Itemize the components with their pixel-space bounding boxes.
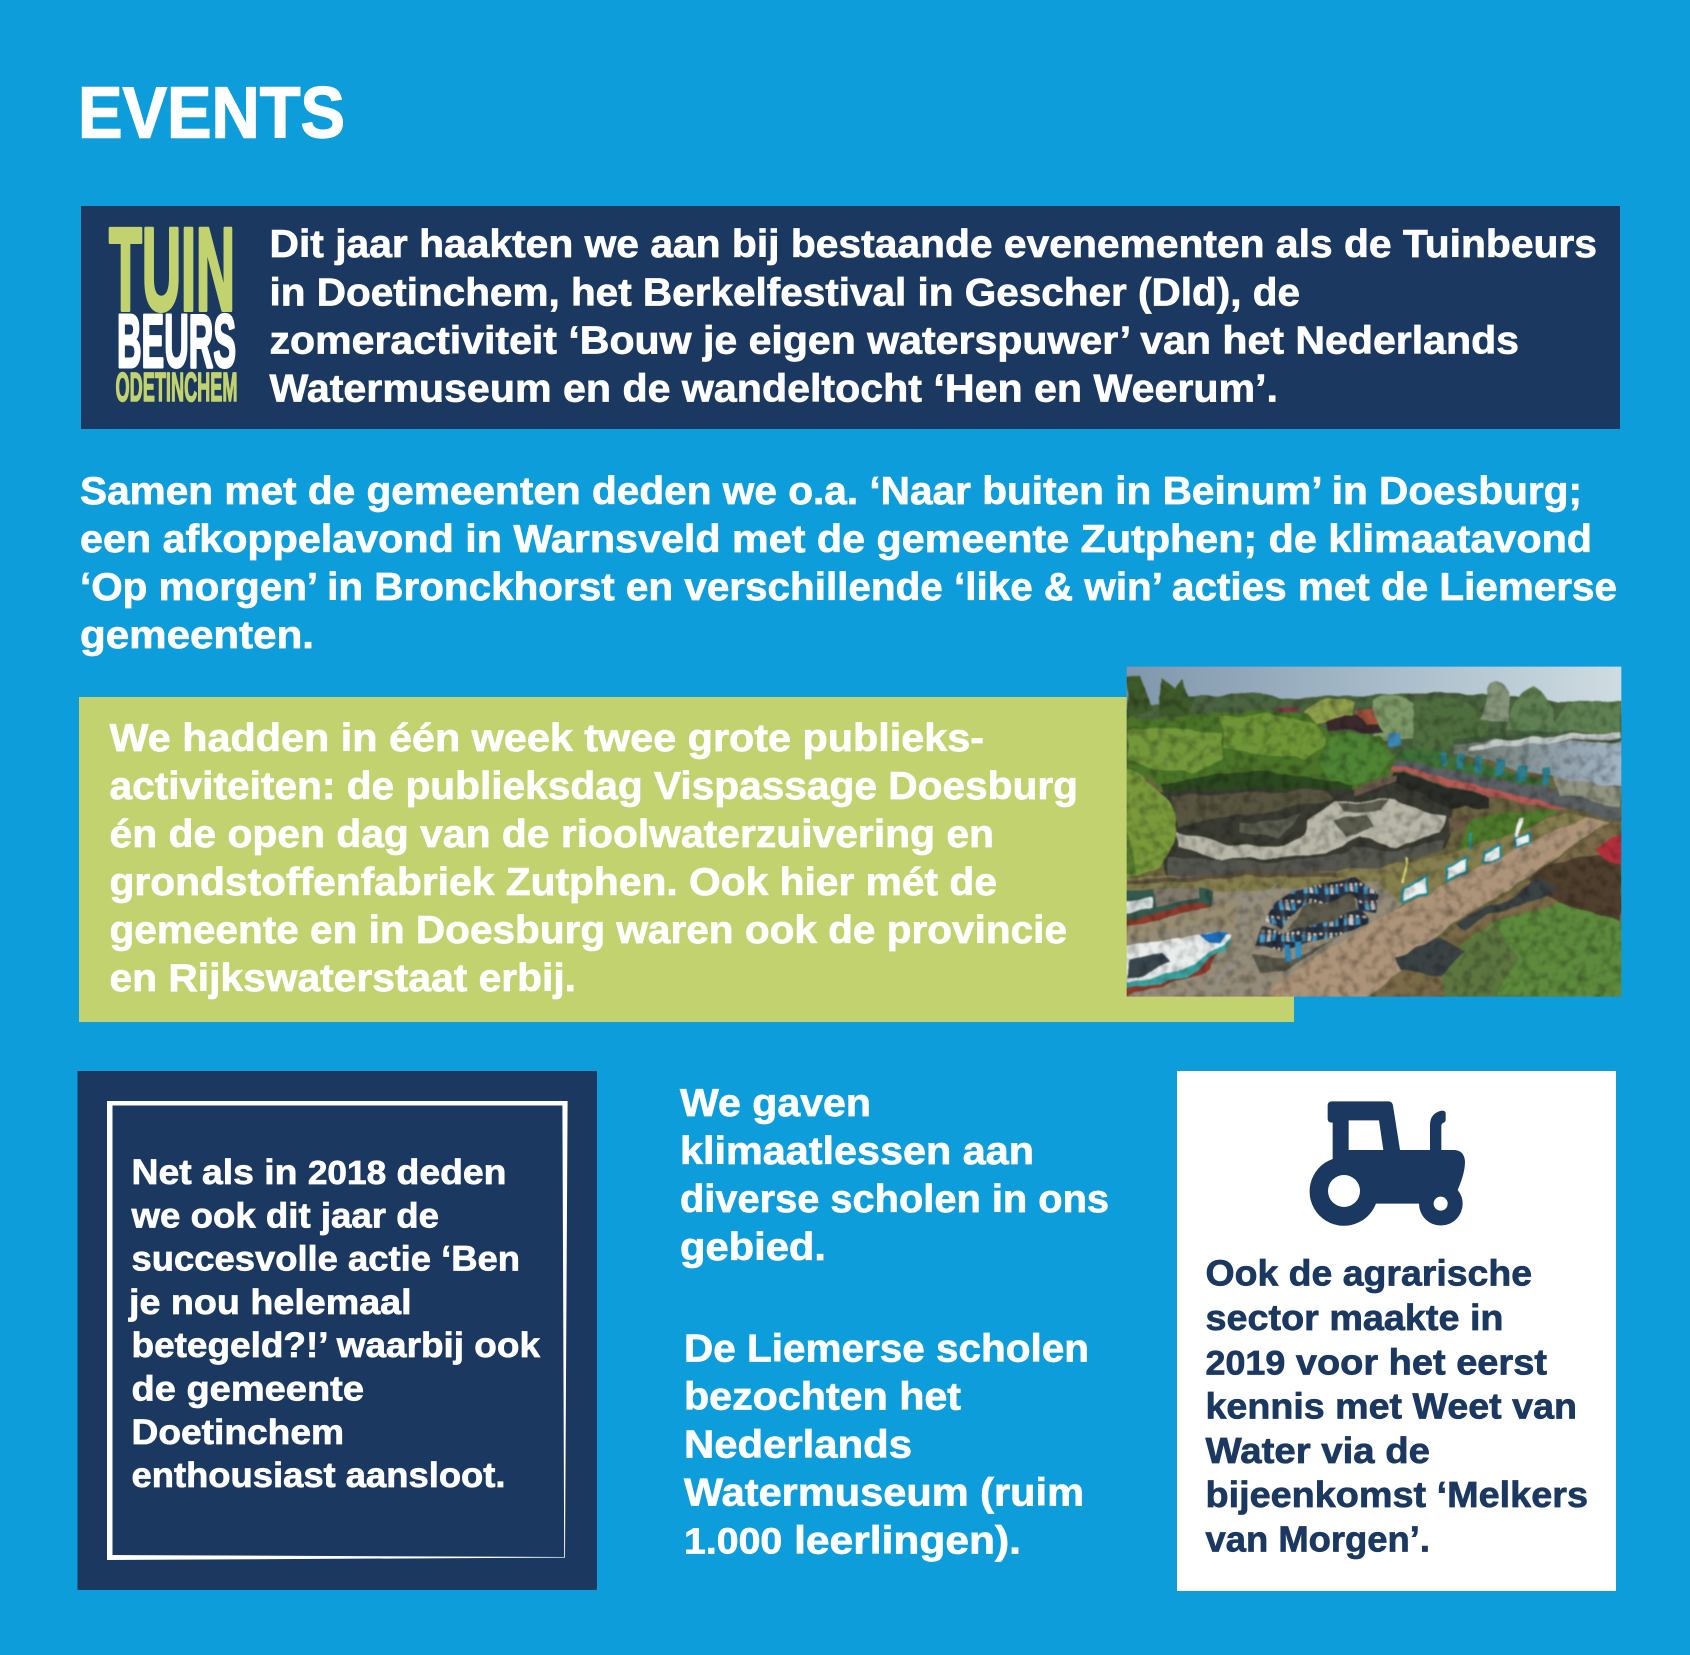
text: tile campaign: enthousiast aansloot.	[132, 1456, 506, 1495]
text: banner paragraph	[270, 223, 1597, 411]
text: banner paragraph: Dit jaar haakten we aan bij bestaande evenementen als de Tuinbeurs	[270, 223, 1597, 266]
text: public activities paragraph	[110, 717, 1078, 1000]
text: climate lessons: klimaatlessen aan	[680, 1130, 1034, 1173]
text: public activities paragraph: én de open dag van de rioolwaterzuivering en	[110, 813, 994, 856]
text: public activities paragraph: gemeente en in Doesburg waren ook de provincie	[110, 909, 1067, 952]
text: tile campaign: Doetinchem	[132, 1413, 344, 1452]
text: agricultural sector: 2019 voor het eerst	[1206, 1341, 1547, 1382]
icon: tractor	[1310, 1101, 1465, 1226]
text: tile campaign: we ook dit jaar de	[130, 1196, 439, 1235]
text: agricultural sector: kennis met Weet van	[1206, 1386, 1577, 1427]
panel: Tuinbeurs banner	[81, 204, 1620, 429]
text: public activities paragraph: en Rijkswaterstaat erbij.	[110, 957, 576, 1000]
text: agricultural sector: Water via de	[1206, 1430, 1430, 1471]
text: agricultural sector: van Morgen’.	[1206, 1518, 1430, 1560]
panel: Tuinbeurs banner: TUIN	[109, 204, 235, 336]
text: tile campaign	[128, 1153, 541, 1495]
text: banner paragraph: in Doetinchem, het Berkelfestival in Gescher (Dld), de	[270, 272, 1300, 314]
text: tile campaign: Net als in 2018 deden	[132, 1153, 506, 1192]
text: tile campaign: de gemeente	[132, 1370, 364, 1408]
photo: aerial view of the fish passage with crowd	[1126, 666, 1622, 997]
text: tile campaign: je nou helemaal	[128, 1283, 412, 1322]
text: climate lessons: diverse scholen in ons	[680, 1178, 1109, 1221]
text: agricultural sector: Ook de agrarische	[1206, 1252, 1532, 1294]
logo: Tuinbeurs Doetinchem	[109, 204, 238, 410]
text: water museum visits: 1.000 leerlingen).	[684, 1520, 1021, 1562]
text: agricultural sector: sector maakte in	[1206, 1297, 1504, 1338]
text: water museum visits: Watermuseum (ruim	[684, 1472, 1084, 1514]
text: water museum visits: Nederlands	[684, 1424, 912, 1466]
panel: Tuinbeurs banner: ODETINCHEM	[116, 364, 238, 410]
text: municipalities paragraph: Samen met de gemeenten deden we o.a. ‘Naar buiten in Beinum’ in Doesburg;	[80, 470, 1582, 513]
panel: agricultural sector	[1177, 1071, 1616, 1591]
text: climate lessons: gebied.	[680, 1226, 826, 1269]
panel: navy tile campaign	[78, 1071, 597, 1590]
text: tile campaign: betegeld?!’ waarbij ook	[132, 1326, 541, 1365]
text: municipalities paragraph: gemeenten.	[80, 614, 314, 657]
text: municipalities paragraph: een afkoppelavond in Warnsveld met de gemeente Zutphen; de klimaatavond	[80, 518, 1592, 561]
text: municipalities paragraph	[80, 470, 1617, 657]
text: public activities paragraph: activiteiten: de publieksdag Vispassage Doesburg	[110, 765, 1078, 808]
text: banner paragraph: zomeractiviteit ‘Bouw je eigen waterspuwer’ van het Nederlands	[270, 320, 1519, 362]
text: water museum visits: De Liemerse scholen	[684, 1328, 1089, 1370]
text: agricultural sector: bijeenkomst ‘Melkers	[1206, 1474, 1588, 1515]
decorative frame with tapering stroke	[107, 1101, 568, 1560]
text: public activities paragraph: We hadden in één week twee grote publieks-	[110, 717, 984, 760]
text: banner paragraph: Watermuseum en de wandeltocht ‘Hen en Weerum’.	[270, 368, 1278, 411]
text: agricultural sector	[1206, 1252, 1588, 1560]
text: municipalities paragraph: ‘Op morgen’ in Bronckhorst en verschillende ‘like & win’ acties met de Liemerse	[80, 566, 1617, 609]
panel: Tuinbeurs banner: BEURS	[117, 299, 236, 383]
text: water museum visits	[684, 1328, 1089, 1562]
title: EVENTS	[78, 72, 345, 153]
text: public activities paragraph: grondstoffenfabriek Zutphen. Ook hier mét de	[110, 861, 997, 904]
panel: green public activities	[79, 697, 1294, 1022]
text: climate lessons	[680, 1082, 1109, 1269]
text: climate lessons: We gaven	[680, 1082, 871, 1125]
text: tile campaign: succesvolle actie ‘Ben	[132, 1240, 520, 1279]
text: water museum visits: bezochten het	[684, 1376, 961, 1418]
